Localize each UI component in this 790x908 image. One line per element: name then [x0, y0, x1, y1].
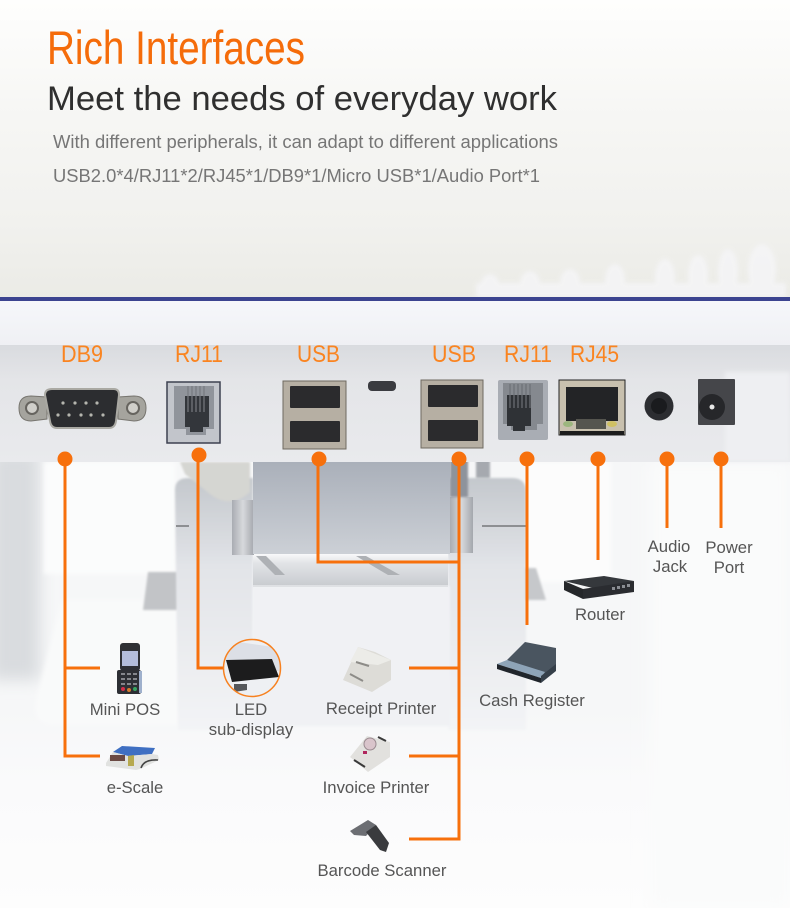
label: Invoice Printer: Invoice Printer	[323, 778, 430, 797]
port label: RJ45: RJ45	[570, 341, 619, 368]
port: RJ11 left	[167, 382, 220, 443]
icon: Mini POS	[117, 643, 142, 694]
connector: RJ45 to Router	[590, 452, 606, 560]
connector: RJ11 to LED sub-display	[192, 448, 225, 668]
label: Cash Register: Cash Register	[479, 691, 585, 710]
connector: USB left joins USB right	[312, 452, 459, 562]
label: Power Port: Port	[714, 558, 745, 577]
label: LED sub-display: sub-display	[209, 720, 294, 739]
port label: RJ11 right: RJ11	[504, 341, 552, 368]
port: USB left	[283, 381, 346, 449]
connector: RJ11 to Cash Register	[520, 452, 534, 625]
port: audio jack	[644, 392, 674, 420]
connector: DB9 to Mini POS and e-Scale	[58, 452, 100, 756]
port: RJ45	[559, 380, 625, 435]
connector: USB right to printers and scanner	[409, 452, 466, 839]
icon: Router	[564, 576, 634, 599]
port label: USB right: USB	[432, 341, 476, 368]
icon: LED sub-display	[224, 640, 282, 696]
port: RJ11 right	[498, 380, 548, 440]
background: lower blurred stand	[0, 450, 790, 908]
icon: Invoice Printer	[350, 736, 390, 772]
device edge strip	[0, 297, 790, 462]
port label: USB left: USB	[297, 341, 340, 368]
label: LED sub-display	[209, 700, 294, 739]
label: Power Port	[705, 538, 753, 577]
connector: Audio Jack	[660, 452, 674, 528]
description line 2: USB2.0*4/RJ11*2/RJ45*1/DB9*1/Micro USB*1/Audio Port*1	[53, 166, 540, 186]
label: Barcode Scanner: Barcode Scanner	[318, 861, 447, 880]
port label: DB9: DB9	[61, 341, 103, 368]
label: Power Port: Power	[705, 538, 753, 557]
label: Router: Router	[575, 605, 625, 624]
icon: Cash Register	[497, 642, 556, 683]
port: DB9 connector	[19, 389, 146, 428]
icon: Barcode Scanner	[350, 820, 389, 852]
label: e-Scale: e-Scale	[107, 778, 163, 797]
port: power jack	[698, 379, 735, 425]
label: Audio Jack	[648, 537, 690, 576]
port label: RJ11 left: RJ11	[175, 341, 223, 368]
subtitle: Meet the needs of everyday work	[47, 80, 558, 118]
title: Rich Interfaces	[47, 21, 305, 74]
port: micro USB	[368, 381, 396, 391]
icon: e-Scale	[106, 746, 159, 770]
label: Receipt Printer: Receipt Printer	[326, 699, 437, 718]
description line 1: With different peripherals, it can adapt to different applications	[53, 132, 558, 152]
icon: Receipt Printer	[343, 647, 391, 692]
label: Audio Jack: Audio	[648, 537, 690, 556]
background: upper backdrop	[0, 0, 790, 298]
port: USB right	[421, 380, 483, 448]
label: LED sub-display: LED	[235, 700, 267, 719]
connector: Power Port	[714, 452, 728, 528]
label: Audio Jack: Jack	[653, 557, 688, 576]
label: Mini POS: Mini POS	[90, 700, 160, 719]
